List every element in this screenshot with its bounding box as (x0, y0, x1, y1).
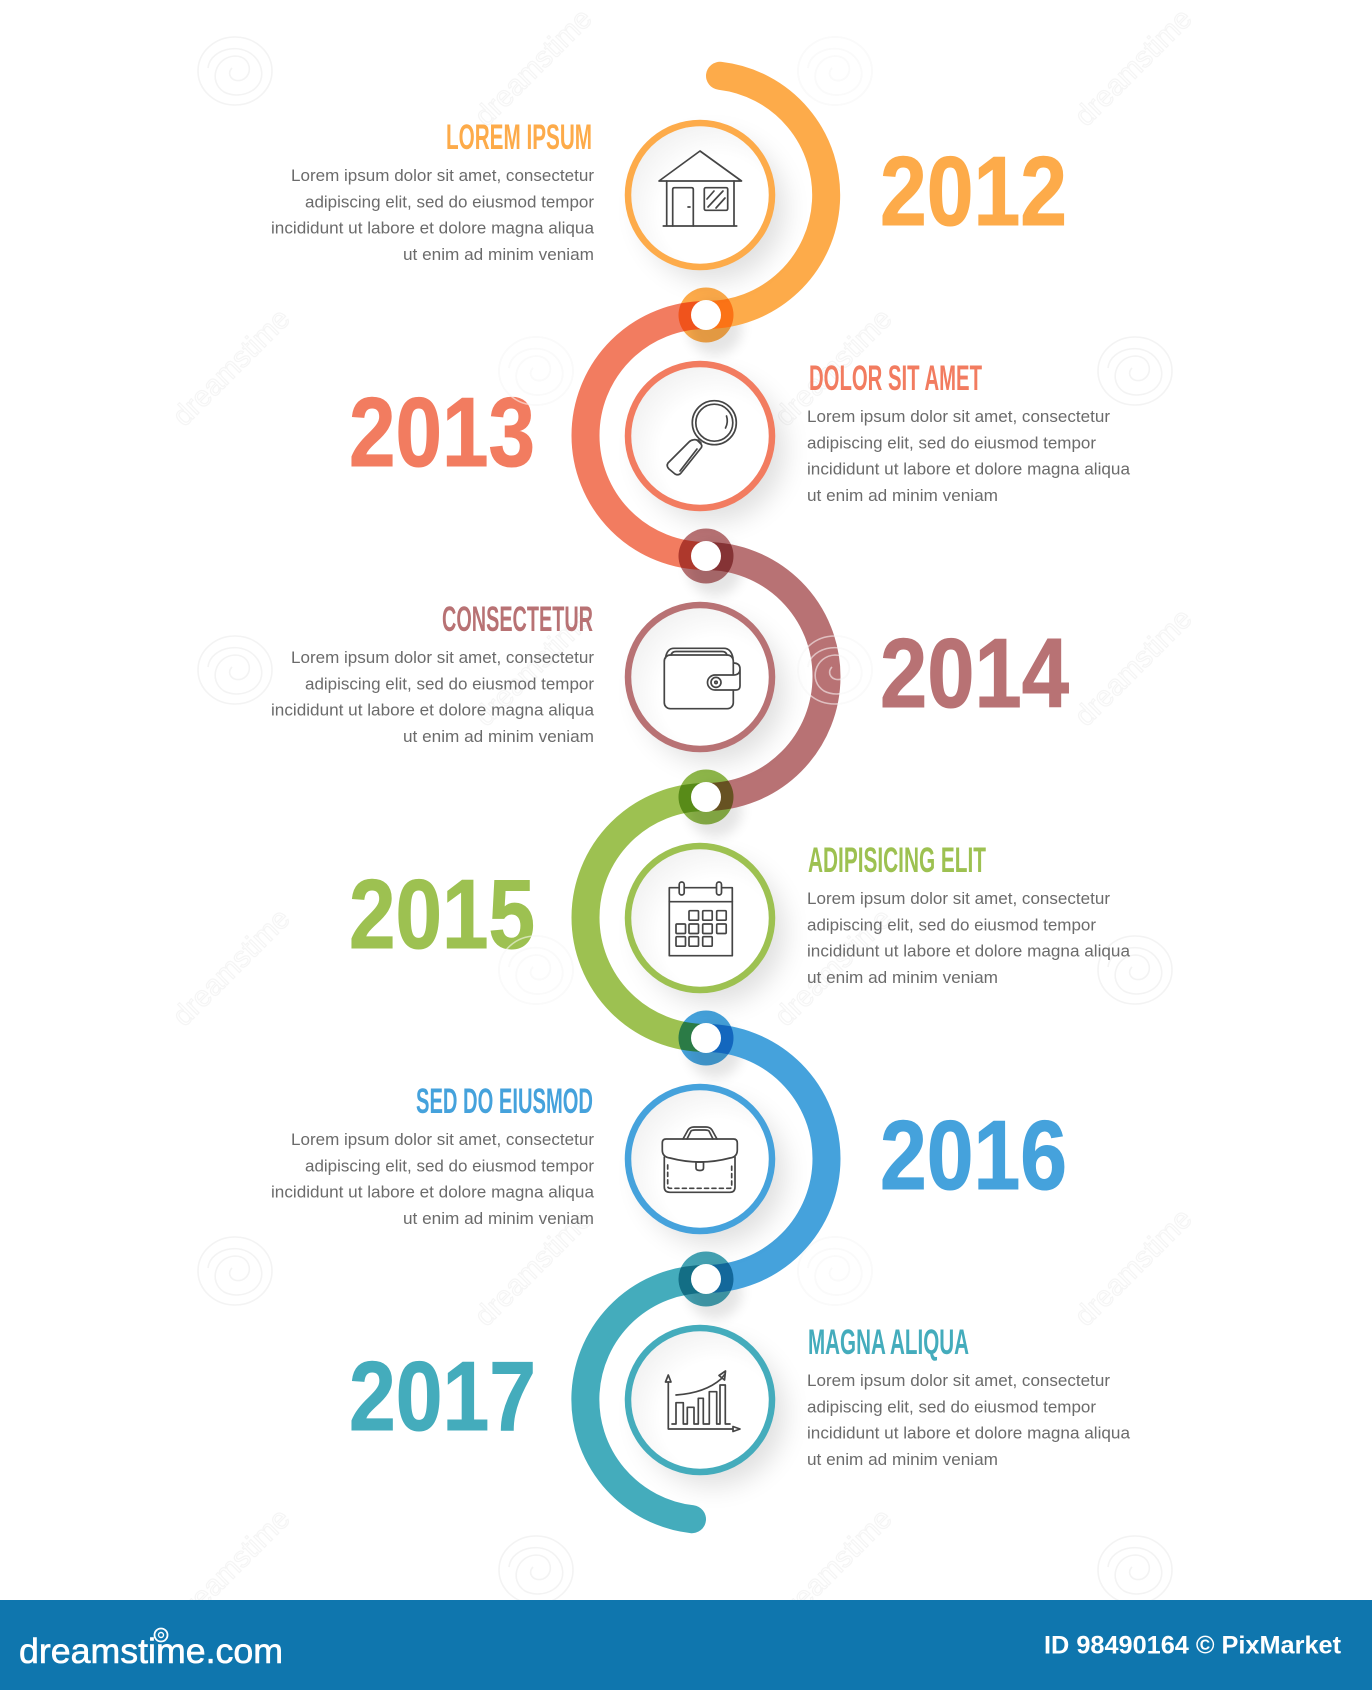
heading: consectetur: CONSECTETUR (442, 600, 593, 639)
heading: dolor sit amet: DOLOR SIT AMET (809, 359, 982, 398)
watermark words (167, 3, 1199, 1633)
watermark words: dreamstime (769, 903, 899, 1033)
step 2014 (271, 600, 1069, 763)
white watermark overlay on coloured shapes (499, 37, 872, 1305)
text block: Lorem ipsum dolor sit amet, consectetur (807, 1372, 1111, 1390)
text block (271, 167, 595, 264)
text block: Lorem ipsum dolor sit amet, consectetur (291, 167, 595, 185)
icon: magnifier (667, 401, 736, 475)
text block: adipiscing elit, sed do eiusmod tempor (807, 1398, 1097, 1416)
circle badge (628, 1087, 785, 1245)
text block: ut enim ad minim veniam (403, 728, 594, 746)
junction node 1 (678, 288, 734, 342)
watermark words: dreamstime (769, 1503, 899, 1633)
footer: dreamstime logo: dreamstime.com (19, 1632, 283, 1671)
text block: ut enim ad minim veniam (403, 1210, 594, 1228)
text block: incididunt ut labore et dolore magna aliqua (807, 461, 1131, 479)
text block: ut enim ad minim veniam (807, 969, 998, 987)
text block: incididunt ut labore et dolore magna aliqua (271, 702, 595, 720)
serpentine ribbon (585, 76, 827, 1519)
text block (807, 408, 1131, 505)
year 2017: 2017 (349, 1341, 536, 1451)
text block: adipiscing elit, sed do eiusmod tempor (305, 675, 595, 693)
text block: Lorem ipsum dolor sit amet, consectetur (291, 649, 595, 667)
text block: ut enim ad minim veniam (403, 246, 594, 264)
watermark words: dreamstime (1069, 1203, 1199, 1333)
year 2015: 2015 (349, 859, 535, 969)
text block: adipiscing elit, sed do eiusmod tempor (807, 434, 1097, 452)
circle badge (628, 846, 785, 1004)
heading: sed do eiusmod: SED DO EIUSMOD (416, 1082, 593, 1121)
circle badge (628, 123, 785, 281)
step 2016 (271, 1082, 1067, 1245)
junction node 3 (678, 770, 734, 824)
text block: Lorem ipsum dolor sit amet, consectetur (291, 1131, 595, 1149)
watermark words: dreamstime (469, 1203, 599, 1333)
step 2013 (349, 359, 1131, 522)
circle badge (628, 1328, 785, 1486)
text block: ut enim ad minim veniam (807, 1451, 998, 1469)
year 2013: 2013 (349, 377, 535, 487)
text block: incididunt ut labore et dolore magna aliqua (271, 220, 595, 238)
year 2016: 2016 (880, 1100, 1067, 1210)
heading: adipisicing elit: ADIPISICING ELIT (808, 841, 986, 880)
step 2012 (271, 118, 1067, 281)
icon: briefcase (662, 1127, 737, 1192)
text block: incididunt ut labore et dolore magna aliqua (807, 1425, 1131, 1443)
circle badge (628, 605, 785, 763)
icon: calendar (669, 882, 732, 956)
junction node 4 (678, 1010, 734, 1066)
junction shadows (688, 301, 742, 1319)
step 2015 (349, 841, 1131, 1004)
watermark words: dreamstime (769, 303, 899, 433)
step 2017 (349, 1323, 1131, 1486)
junction node 2 (678, 528, 734, 584)
junction node 5 (678, 1252, 734, 1306)
watermark words: dreamstime (167, 303, 297, 433)
heading: magna aliqua: MAGNA ALIQUA (808, 1323, 969, 1362)
watermark words: dreamstime (167, 1503, 297, 1633)
text block: Lorem ipsum dolor sit amet, consectetur (807, 890, 1111, 908)
icon: wallet (664, 648, 740, 709)
heading: lorem ipsum: LOREM IPSUM (446, 118, 592, 157)
watermark words: dreamstime (1069, 3, 1199, 133)
watermark words: dreamstime (469, 3, 599, 133)
watermark words: dreamstime (167, 903, 297, 1033)
text block: Lorem ipsum dolor sit amet, consectetur (807, 408, 1111, 426)
text block: incididunt ut labore et dolore magna aliqua (807, 943, 1131, 961)
text block (807, 1372, 1131, 1469)
text block (807, 890, 1131, 987)
footer: image id and credit: ID 98490164 © PixMarket (1044, 1632, 1342, 1660)
text block: adipiscing elit, sed do eiusmod tempor (807, 916, 1097, 934)
text block: ut enim ad minim veniam (807, 487, 998, 505)
footer bar (0, 1600, 1372, 1690)
watermark words: dreamstime (469, 603, 599, 733)
year 2014: 2014 (880, 618, 1069, 728)
text block (271, 1131, 595, 1228)
icon: house (659, 151, 742, 226)
circle badge (628, 364, 785, 522)
icon: growth chart (666, 1371, 740, 1432)
watermark words: dreamstime (1069, 603, 1199, 733)
text block: incididunt ut labore et dolore magna aliqua (271, 1184, 595, 1202)
text block: adipiscing elit, sed do eiusmod tempor (305, 1157, 595, 1175)
text block: adipiscing elit, sed do eiusmod tempor (305, 193, 595, 211)
year 2012: 2012 (880, 136, 1067, 246)
text block (271, 649, 595, 746)
watermark spirals (198, 37, 1172, 1604)
